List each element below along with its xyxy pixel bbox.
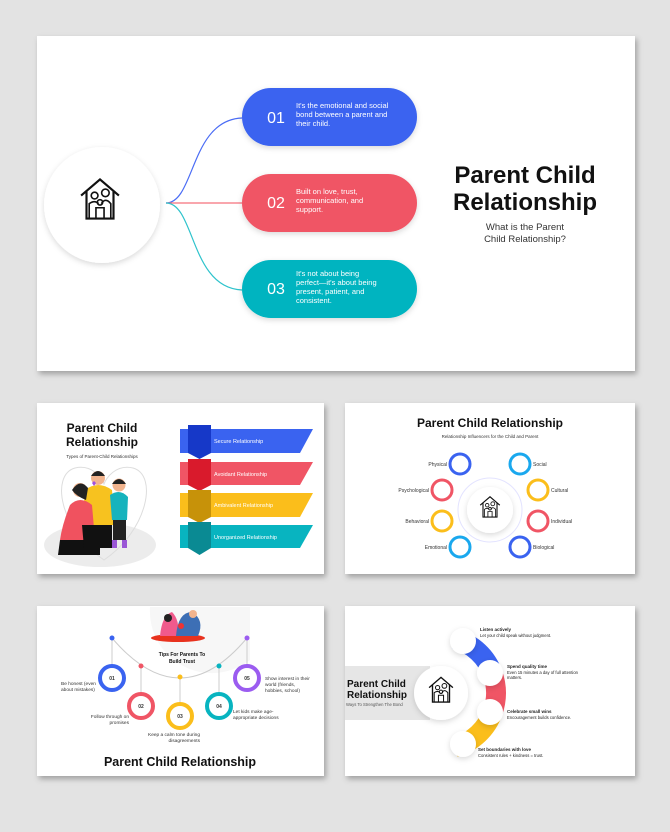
- nodes: Biological: [533, 545, 554, 551]
- pill 03: present, patient, and: [296, 287, 364, 296]
- pill 02: [242, 174, 417, 232]
- pill 02: communication, and: [296, 196, 363, 205]
- nodes: Emotional: [425, 545, 447, 551]
- heading: Types of Parent-Child Relationships: [66, 454, 139, 459]
- gray band heading: Ways To Strengthen The Bond: [346, 702, 403, 707]
- step texts: Let your child speak without judgment.: [480, 633, 551, 638]
- step circles: 05: [244, 676, 250, 682]
- gray band heading: [345, 666, 430, 720]
- nodes: Physical: [428, 462, 447, 468]
- title: Relationship: [453, 189, 597, 216]
- step circles: 04: [216, 704, 222, 710]
- tip texts: Keep a calm tone during: [148, 732, 200, 738]
- tip texts: Follow through on: [91, 714, 129, 720]
- heading: [66, 421, 139, 459]
- tip texts: world (friends,: [265, 682, 295, 688]
- subtitle: Build Trust: [169, 659, 195, 665]
- nodes: [398, 454, 572, 557]
- tip texts: Show interest in their: [265, 676, 310, 682]
- title: What is the Parent: [486, 222, 564, 233]
- heading: Relationship: [66, 435, 138, 449]
- panel: main slide: [37, 36, 635, 371]
- pill 03: consistent.: [296, 296, 332, 305]
- pill 01: 01: [267, 110, 285, 127]
- nodes: Cultural: [551, 488, 568, 494]
- step texts: [478, 627, 579, 758]
- nodes: Social: [533, 462, 547, 468]
- step icon circles: [450, 628, 503, 757]
- banner: ambivalent: [180, 490, 313, 523]
- banner: unorganized: [180, 522, 313, 555]
- step texts: Encouragement builds confidence.: [507, 715, 571, 720]
- pill 01: their child.: [296, 119, 330, 128]
- footer title: Parent Child Relationship: [104, 755, 256, 769]
- connector lines: [166, 118, 242, 290]
- pill 02: 02: [267, 195, 285, 212]
- nodes: Individual: [551, 519, 572, 525]
- pill 01: [242, 88, 417, 146]
- heading: Parent Child Relationship: [417, 416, 563, 430]
- banner: unorganized: Unorganized Relationship: [214, 535, 277, 541]
- gray band heading: Relationship: [347, 690, 407, 701]
- gray band heading: Parent Child: [347, 679, 406, 690]
- panel: types of relationships: [37, 403, 324, 574]
- pill 01: bond between a parent and: [296, 110, 387, 119]
- pill 03: perfect—it's about being: [296, 278, 377, 287]
- pill 01: It's the emotional and social: [296, 101, 389, 110]
- pill 02: support.: [296, 205, 323, 214]
- step circles: 03: [177, 714, 183, 720]
- illustration: family hug: [44, 467, 156, 567]
- step texts: Spend quality time: [507, 664, 548, 669]
- heading: Parent Child: [67, 421, 137, 435]
- step texts: matters.: [507, 675, 522, 680]
- step texts: Listen actively: [480, 627, 512, 632]
- tip texts: Let kids make age-: [233, 709, 274, 715]
- tip texts: hobbies, school): [265, 688, 300, 694]
- illustration backdrop: [150, 607, 250, 673]
- pill 03: It's not about being: [296, 269, 359, 278]
- tip texts: appropriate decisions: [233, 715, 279, 721]
- nodes: Behavioral: [405, 519, 429, 525]
- arc timeline: [112, 638, 247, 716]
- heading: Relationship Influencers for the Child and Parent: [442, 434, 539, 439]
- pill 03: 03: [267, 281, 285, 298]
- pill 03: [242, 260, 417, 318]
- icon: family house circle: [44, 147, 160, 263]
- step circles: [100, 636, 259, 728]
- step texts: Even 15 minutes a day of full attention: [507, 670, 579, 675]
- tip texts: Be honest (even: [61, 681, 96, 687]
- banner: secure: Secure Relationship: [214, 439, 263, 445]
- panel: relationship influencers: [345, 403, 635, 574]
- tip texts: promises: [110, 720, 130, 726]
- title: Child Relationship?: [484, 234, 566, 245]
- tip texts: [61, 676, 310, 744]
- central hub: [458, 478, 522, 542]
- tip texts: about mistakes): [61, 687, 95, 693]
- step circles: 01: [109, 676, 115, 682]
- banner: avoidant: Avoidant Relationship: [214, 472, 267, 478]
- center icon: [414, 666, 468, 720]
- nodes: Psychological: [398, 488, 429, 494]
- banner: secure: [180, 425, 313, 459]
- step texts: Set boundaries with love: [478, 747, 532, 752]
- banner: ambivalent: Ambivalent Relationship: [214, 503, 273, 509]
- step texts: Celebrate small wins: [507, 709, 552, 714]
- title: Parent Child: [454, 162, 596, 189]
- banner: avoidant: [180, 459, 313, 491]
- tip texts: disagreements: [169, 738, 201, 744]
- panel: tips to build trust: [37, 606, 324, 776]
- pill 02: Built on love, trust,: [296, 187, 358, 196]
- subtitle: [159, 652, 205, 665]
- ring segments: [455, 639, 496, 747]
- title: [453, 162, 597, 245]
- heading: [417, 416, 563, 439]
- panel: ways to strengthen the bond: [345, 606, 635, 776]
- subtitle: Tips For Parents To: [159, 652, 205, 658]
- step texts: Consistent rules + kindness = trust.: [478, 753, 543, 758]
- step circles: 02: [138, 704, 144, 710]
